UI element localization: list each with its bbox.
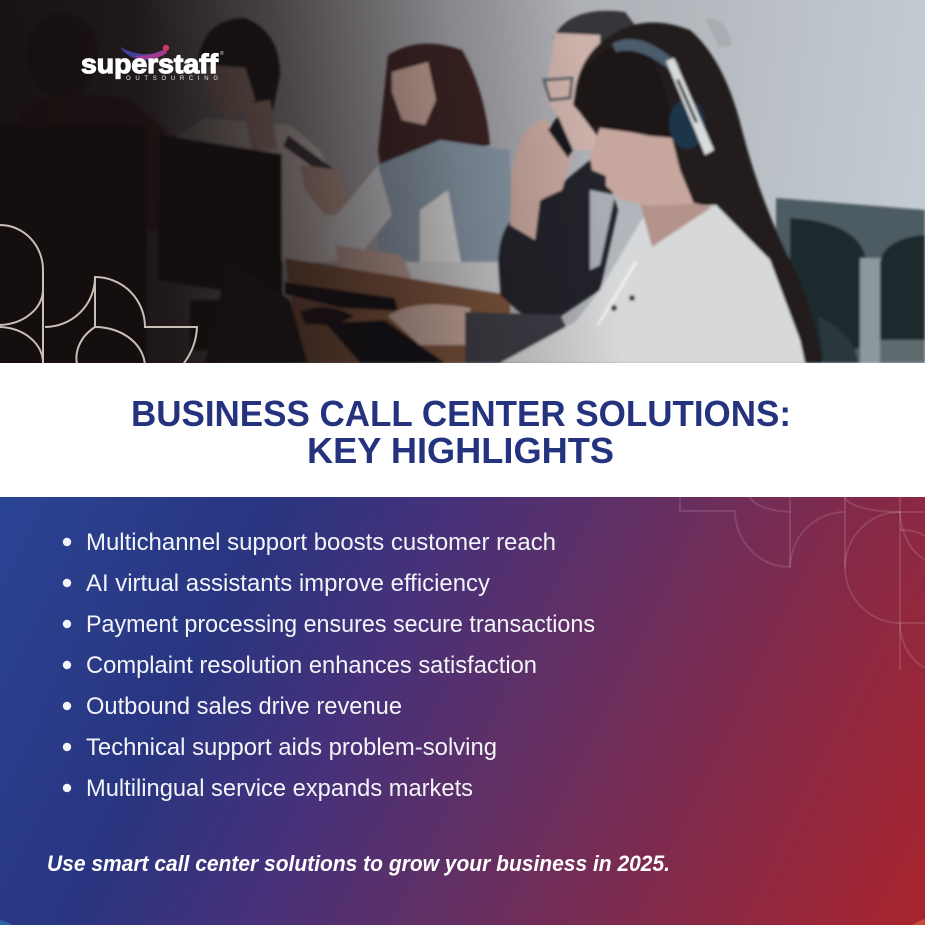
item 3: Payment processing ensures secure transactions <box>86 611 595 638</box>
photo: call center agents at desks <box>0 0 925 368</box>
title band <box>0 363 925 497</box>
woman with headset: neck, face and bangs <box>573 42 712 247</box>
monitors and laptop <box>108 136 308 363</box>
item 1: Multichannel support boosts customer reach <box>86 529 556 556</box>
man on phone <box>465 11 650 363</box>
woman with headset: hair <box>574 22 822 363</box>
headset <box>612 39 714 155</box>
panel corner accents <box>0 919 925 925</box>
item 6: Technical support aids problem-solving <box>86 734 497 761</box>
logo: OUTSOURCING <box>126 76 218 82</box>
item 5: Outbound sales drive revenue <box>86 693 402 720</box>
closing statement: Use smart call center solutions to grow your business in 2025. <box>47 851 670 876</box>
lower wall and chairs <box>705 19 925 363</box>
gradient panel <box>0 497 925 925</box>
desk with keyboard and mouse <box>285 258 510 363</box>
logo: ® <box>220 50 224 57</box>
item 7: Multilingual service expands markets <box>86 775 473 802</box>
woman on phone at left <box>178 18 352 262</box>
item 4: Complaint resolution enhances satisfaction <box>86 652 537 679</box>
middle woman <box>326 44 512 300</box>
title <box>131 393 791 471</box>
item 2: AI virtual assistants improve efficiency <box>86 570 490 597</box>
woman with headset: shirt <box>500 205 805 363</box>
far left colleague <box>20 13 165 230</box>
title: BUSINESS CALL CENTER SOLUTIONS: <box>131 393 791 434</box>
decorative line pattern: panel corner <box>680 497 925 670</box>
decorative line pattern: photo corner <box>0 225 197 368</box>
title: KEY HIGHLIGHTS <box>307 430 614 471</box>
shirt laces and chair <box>598 262 858 363</box>
highlights list <box>63 529 595 802</box>
logo: superstaff <box>81 49 219 79</box>
